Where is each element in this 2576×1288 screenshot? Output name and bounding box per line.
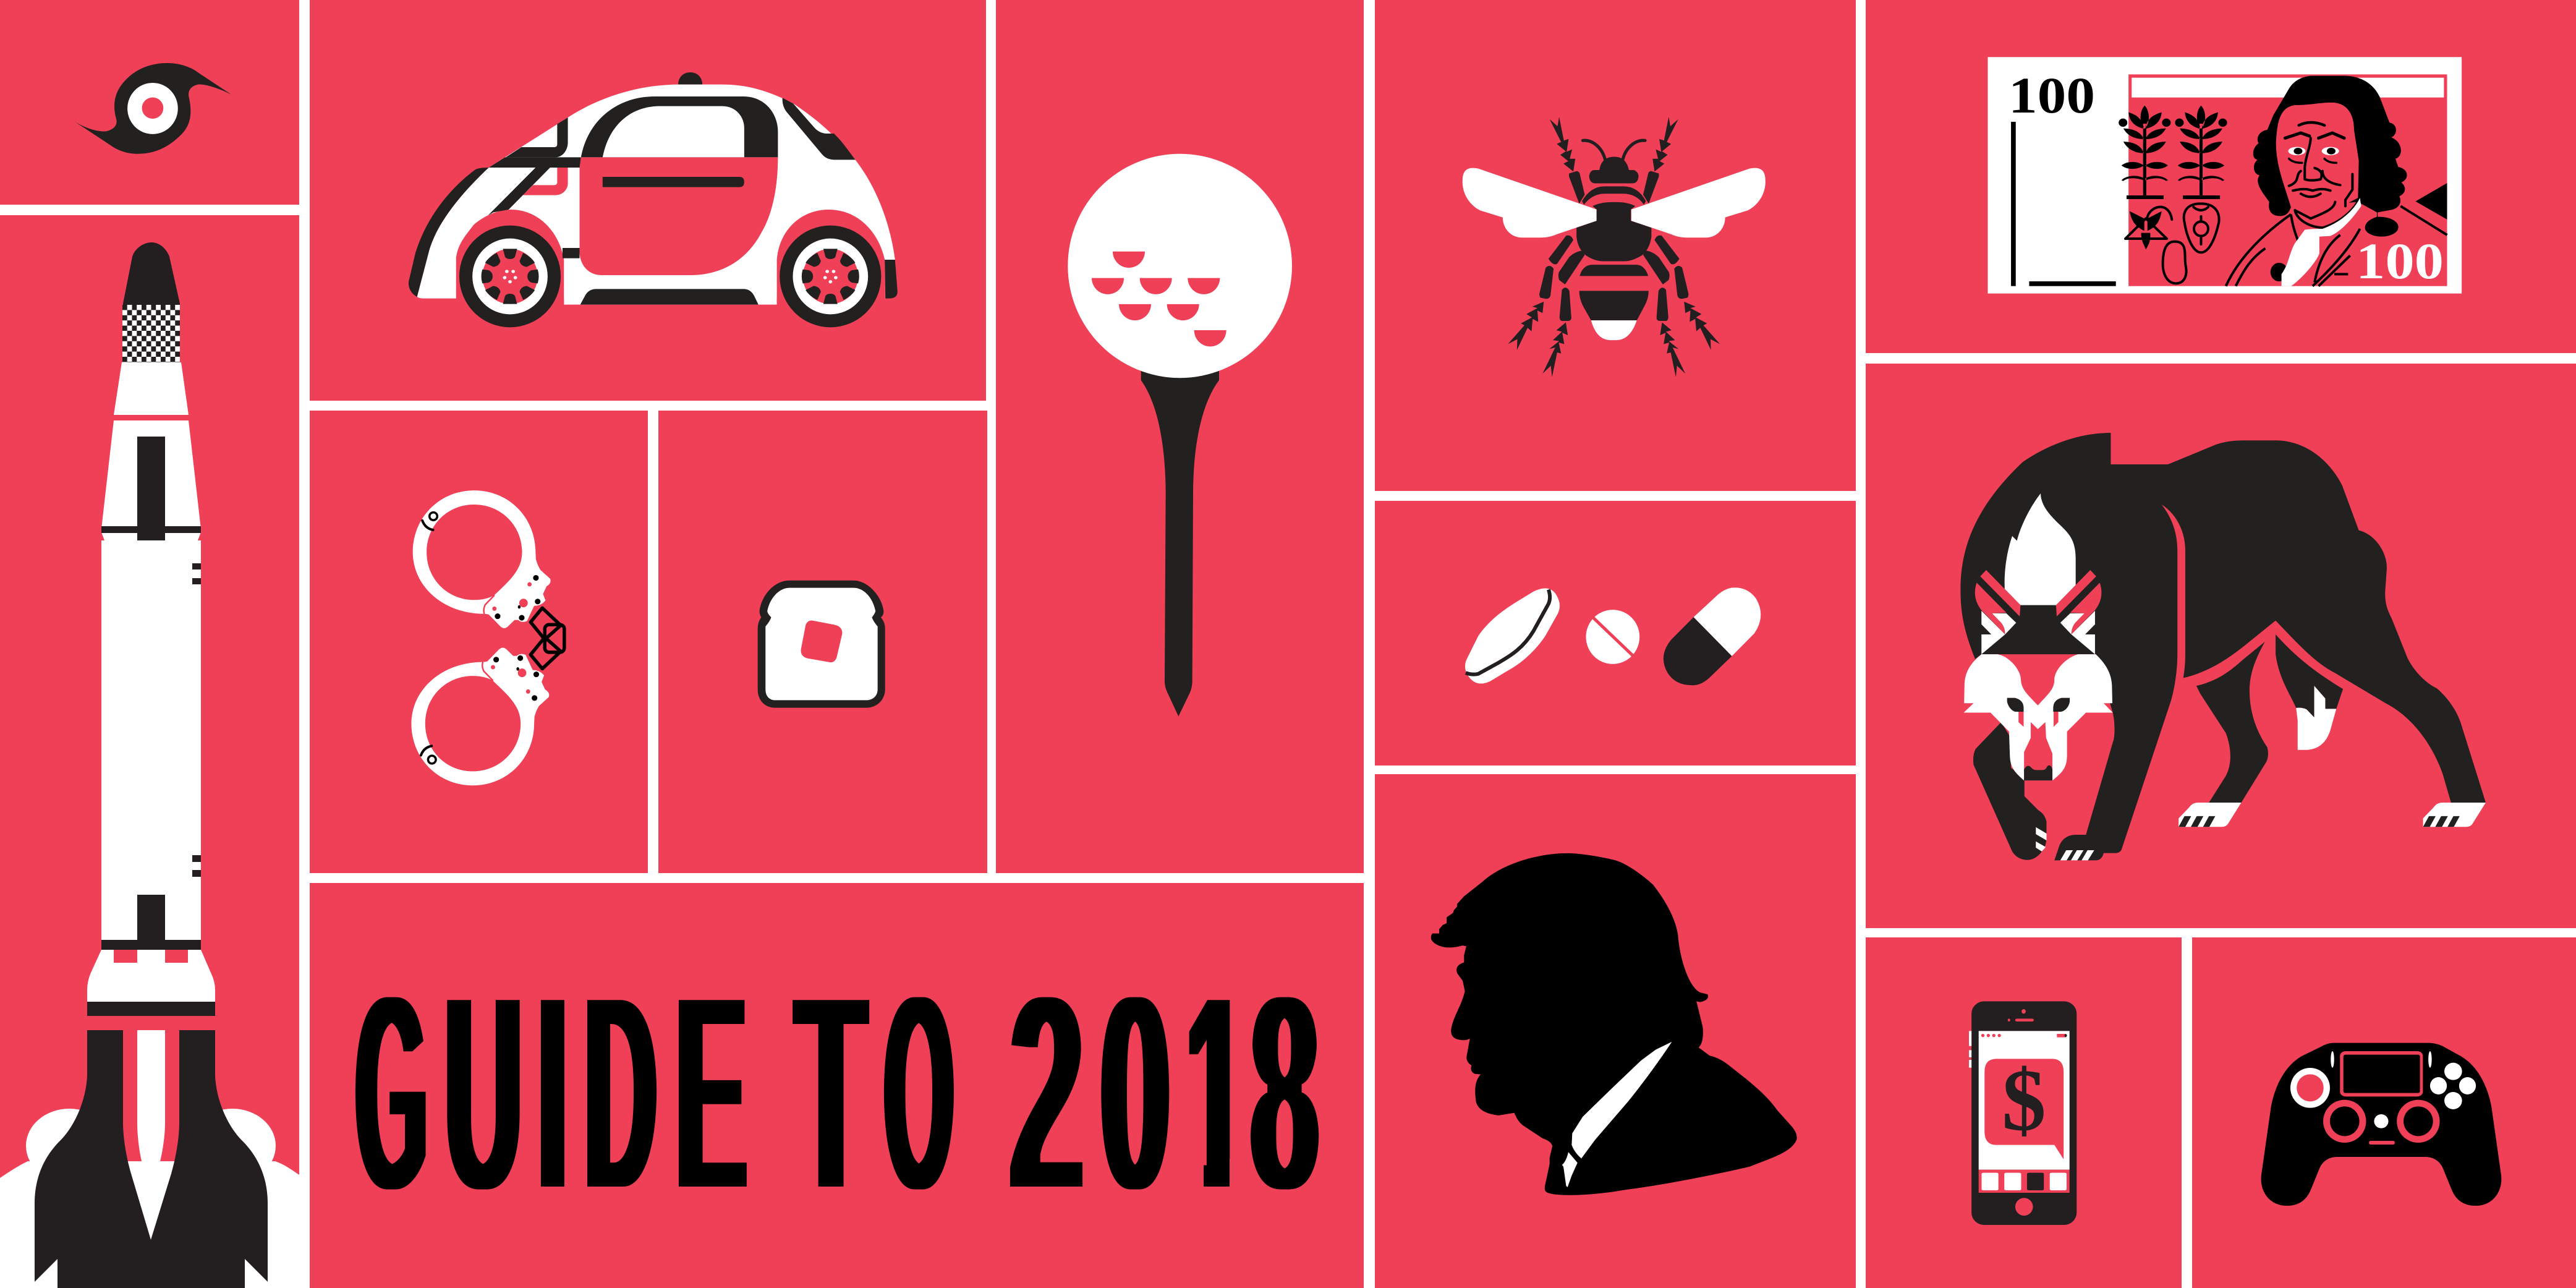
icon: round tablet bbox=[1586, 610, 1639, 664]
icon: wolf ears bbox=[1975, 570, 2101, 654]
panel: bee bbox=[1375, 0, 1856, 491]
icon: game controller bbox=[2261, 1043, 2501, 1206]
panel: pills bbox=[1375, 501, 1856, 766]
panel: toast bbox=[658, 411, 987, 873]
icon: wolf bbox=[1960, 433, 2486, 860]
title: T bbox=[796, 935, 866, 1250]
icon: wolf paws bbox=[2036, 803, 2486, 860]
icon: car bbox=[409, 72, 898, 327]
panel: title bbox=[310, 883, 1364, 1288]
panel: politician silhouette bbox=[1375, 774, 1856, 1288]
title bbox=[356, 935, 1318, 1250]
panel: smartphone bbox=[1866, 937, 2182, 1288]
icon: banknote bbox=[1987, 57, 2462, 294]
title: O bbox=[885, 935, 953, 1250]
title: U bbox=[445, 935, 522, 1250]
icon: oblong pill bbox=[1465, 588, 1560, 684]
icon: capsule bbox=[1664, 587, 1761, 685]
title: D bbox=[585, 935, 657, 1250]
icon: smoke clouds bbox=[0, 1109, 310, 1288]
panel: golf tee bbox=[996, 0, 1364, 873]
icon: wolf head bbox=[1964, 654, 2113, 780]
panel: self-driving car bbox=[310, 0, 986, 401]
panel: banknote bbox=[1866, 0, 2576, 353]
panel: title: 8 bbox=[1251, 935, 1318, 1250]
icon: handcuffs bbox=[411, 490, 564, 785]
icon: rocket bbox=[35, 242, 268, 1288]
icon: golf ball on tee bbox=[1068, 154, 1292, 717]
icon: front wheel bbox=[459, 226, 561, 327]
icon: plants bbox=[2119, 106, 2227, 283]
panel: hurricane bbox=[0, 0, 299, 205]
icon: rear wheel bbox=[780, 226, 881, 327]
panel: game controller bbox=[2192, 937, 2576, 1288]
panel: handcuffs bbox=[310, 411, 648, 873]
icon: pills bbox=[1465, 587, 1761, 685]
panel: rocket bbox=[0, 215, 310, 1288]
panel: wolf bbox=[1866, 364, 2576, 928]
icon: bee bbox=[1463, 117, 1766, 377]
title: 2 bbox=[1010, 935, 1084, 1250]
icon: smartphone bbox=[1969, 1001, 2077, 1225]
icon: profile silhouette bbox=[1431, 853, 1797, 1195]
text: 100 top left: 100 bbox=[2009, 67, 2095, 124]
title: E bbox=[676, 935, 747, 1250]
text: 100 bottom right: 100 bbox=[2356, 232, 2444, 289]
title: 0 bbox=[1100, 935, 1170, 1250]
icon: hurricane symbol bbox=[74, 63, 231, 154]
icon: wigged portrait bbox=[2226, 76, 2447, 286]
icon: slice of bread bbox=[758, 581, 885, 708]
title: 1 bbox=[1186, 935, 1245, 1250]
title: G bbox=[356, 935, 427, 1250]
title: I bbox=[538, 935, 567, 1250]
text: dollar sign: $ bbox=[2002, 1051, 2046, 1149]
